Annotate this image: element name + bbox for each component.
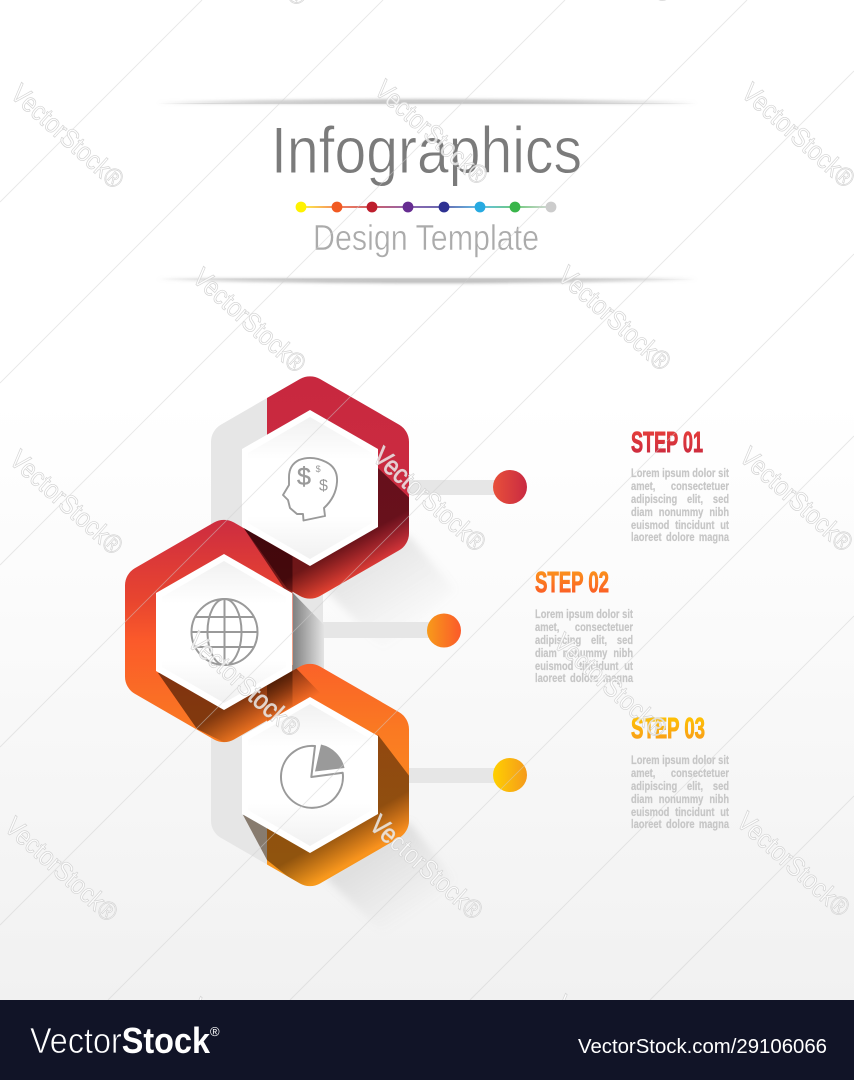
icon: head with dollars: $ xyxy=(297,463,311,491)
watermark overlay: VectorStock® xyxy=(364,809,489,926)
ring 2 red-orange xyxy=(125,520,292,742)
icon: head with dollars: $ xyxy=(319,478,328,494)
step 3 text: euismod tincidunt ut xyxy=(631,805,729,819)
step 2 text: Lorem ipsum dolor sit xyxy=(535,607,633,621)
footer logo: VectorStock xyxy=(30,1020,211,1061)
shadow of white hexagon 1 xyxy=(244,468,409,598)
ring 3 orange xyxy=(267,664,409,886)
step 1 text: Lorem ipsum dolor sit xyxy=(631,466,729,480)
watermark overlay: VectorStock® xyxy=(0,811,124,928)
watermark overlay: VectorStock® xyxy=(5,78,130,195)
step 3 text xyxy=(631,753,730,831)
step 3 text: Lorem ipsum dolor sit xyxy=(631,753,729,767)
step 2 text xyxy=(535,607,634,685)
icon: pie chart xyxy=(281,744,344,808)
watermark overlay: VectorStock® xyxy=(187,262,312,379)
long shadow: hexagon 1 xyxy=(325,535,455,650)
gray shadow beside hexagon 2 xyxy=(293,593,324,690)
watermark overlay: VectorStock® xyxy=(731,806,854,923)
step 2 text: laoreet dolore magna xyxy=(535,671,633,685)
hexagon backing gray xyxy=(125,376,409,886)
dot 3 xyxy=(493,758,527,792)
watermark overlay: VectorStock® xyxy=(369,74,494,191)
connector 1 xyxy=(405,480,497,495)
step 1 text: euismod tincidunt ut xyxy=(631,518,729,532)
step 3 text: laoreet dolore magna xyxy=(631,817,729,831)
step 1 text: laoreet dolore magna xyxy=(631,530,729,544)
icon: globe xyxy=(192,599,258,665)
colored dot timeline xyxy=(296,202,556,212)
hexagon chain diagram xyxy=(100,370,705,935)
footer image id: VectorStock.com/29106066 xyxy=(578,1036,827,1058)
step 1 heading: STEP 01 xyxy=(631,427,703,459)
white hexagon 3 xyxy=(242,697,378,853)
white hexagon 2 xyxy=(156,554,292,710)
step 3 heading: STEP 03 xyxy=(631,713,705,745)
title: Infographics xyxy=(271,113,582,187)
shadow of white hexagon 3 xyxy=(243,735,409,886)
step 3 text: diam nonummy nibh xyxy=(631,792,729,806)
step 2 heading: STEP 02 xyxy=(535,567,609,599)
step 1 text xyxy=(631,466,730,544)
connector 2 xyxy=(320,622,432,638)
step 2 text: amet, consectetuer xyxy=(535,620,633,634)
watermark overlay: VectorStock® xyxy=(182,626,307,743)
ring 1 red xyxy=(267,376,409,599)
watermark overlay: VectorStock® xyxy=(367,441,492,558)
subtitle: Design Template xyxy=(313,217,539,258)
icon: head with dollars: $ xyxy=(316,464,321,474)
step 2 text: euismod tincidunt ut xyxy=(535,659,633,673)
white hexagon 1 xyxy=(242,410,378,566)
step 1 text: amet, consectetuer xyxy=(631,479,729,493)
step 3 text: adipiscing elit, sed xyxy=(631,779,729,793)
step 3 text: amet, consectetuer xyxy=(631,766,729,780)
step 2 text: adipiscing elit, sed xyxy=(535,633,633,647)
icon: head with dollars xyxy=(283,458,337,520)
registered mark: ® xyxy=(210,1024,220,1039)
step 1 text: diam nonummy nibh xyxy=(631,505,729,519)
top rule xyxy=(157,100,697,104)
watermark overlay: VectorStock® xyxy=(4,444,129,561)
watermark overlay: VectorStock® xyxy=(552,260,677,377)
shadow of white hexagon 2 xyxy=(158,665,318,742)
bottom rule xyxy=(157,279,697,283)
watermark overlay: VectorStock® xyxy=(548,627,673,744)
dot 2 xyxy=(427,614,461,648)
step 2 text: diam nonummy nibh xyxy=(535,646,633,660)
long shadow: hexagon 3 xyxy=(325,822,455,935)
step 1 text: adipiscing elit, sed xyxy=(631,492,729,506)
connector 3 xyxy=(405,768,497,783)
dot 1 xyxy=(493,470,527,504)
footer bar xyxy=(0,1000,854,1080)
